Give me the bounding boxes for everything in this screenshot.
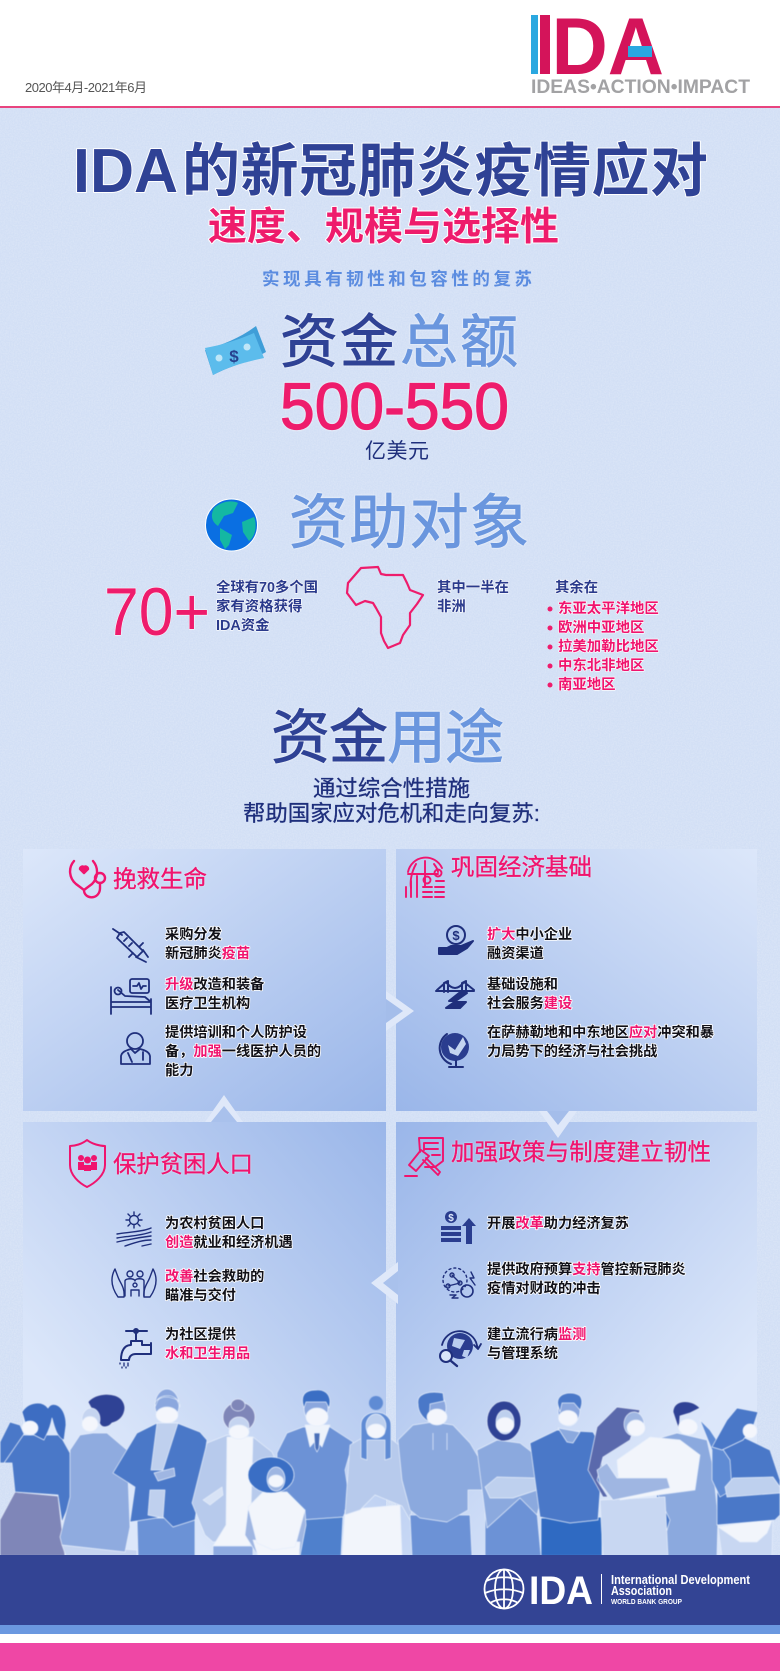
person: curly hair woman: [60, 1394, 137, 1556]
list: other regions: 南亚地区: [558, 676, 616, 693]
person: woman with bun: [342, 1396, 415, 1556]
text: 新冠肺炎疫苗: [165, 945, 250, 962]
list: other regions: 其余在: [555, 578, 598, 596]
text: 提供政府预算支持管控新冠肺炎: [487, 1261, 686, 1278]
text: [487, 926, 572, 962]
arrow: right: [386, 991, 414, 1031]
text: 基础设施和: [487, 976, 558, 993]
logo: IDA International Development Association: WORLD BANK GROUP: [611, 1597, 682, 1606]
text: 扩大中小企业: [487, 926, 572, 943]
text: eligible countries: IDA资金: [216, 616, 270, 634]
text: 升级改造和装备: [165, 976, 264, 993]
text: 为农村贫困人口: [165, 1215, 264, 1232]
text: 社会服务建设: [487, 995, 572, 1012]
text: 提供培训和个人防护设: [165, 1024, 307, 1041]
list: other regions: 欧洲中亚地区: [558, 618, 644, 636]
logo: IDA International Development Association: [484, 1569, 751, 1613]
icon: banknote: [205, 326, 266, 375]
icon: desk globe: [440, 1033, 469, 1067]
icon: bricks with arrow: [441, 1211, 476, 1244]
heading: recipients: 资助对象: [289, 490, 529, 556]
list: other regions: 拉美加勒比地区: [558, 637, 659, 655]
icon: bricks with arrow: $: [448, 1213, 454, 1224]
text: half in Africa: 其中一半在: [437, 578, 509, 596]
subtitle: 速度、规模与选择性: [208, 206, 559, 249]
panel: protect the poor: [23, 1122, 386, 1556]
person: child: [245, 1457, 306, 1556]
text: [487, 1024, 714, 1060]
text: [487, 1261, 686, 1297]
heading: 加强政策与制度建立韧性: [451, 1139, 711, 1165]
icon: shield with people: [70, 1140, 105, 1187]
text: [165, 1215, 293, 1251]
icon: hand with coin: [439, 926, 473, 954]
intro text: [243, 776, 540, 826]
text: 改善社会救助的: [165, 1268, 264, 1285]
person: woman with windswept hair: [700, 1408, 780, 1556]
text: 备，加强一线医护人员的: [165, 1043, 321, 1060]
icon: syringe: [113, 929, 148, 962]
illustration: crowd of people in masks: [0, 1389, 780, 1556]
footer band: [0, 1555, 780, 1671]
icon: epidemic monitoring: [440, 1331, 481, 1366]
icon: globe with coins: [406, 858, 444, 897]
panel: save lives: [23, 849, 386, 1111]
text: 融资渠道: [487, 945, 544, 962]
logo: IDA International Development Association: Association: [611, 1584, 672, 1598]
intro text: 帮助国家应对危机和走向复苏:: [243, 801, 540, 826]
icon: faucet: [120, 1329, 151, 1368]
panel: policy and institutions: [396, 1122, 757, 1556]
arrow: up: [205, 1095, 243, 1122]
logo: IDA Ideas Action Impact: IDEAS•ACTION•IMPACT: [531, 76, 750, 98]
text: [487, 1326, 586, 1362]
icon: hands with family: [112, 1269, 156, 1297]
text: 采购分发: [165, 926, 222, 943]
unit label: 亿美元: [365, 440, 429, 463]
heading: 保护贫困人口: [113, 1151, 253, 1177]
text: half in Africa: [437, 578, 509, 615]
logo: IDA International Development Association: IDA: [529, 1569, 593, 1613]
heading: total funding: 资金总额: [280, 310, 518, 375]
text: 能力: [165, 1062, 193, 1079]
icon: sun over farmland: [117, 1212, 151, 1246]
text: 瞄准与交付: [165, 1287, 236, 1304]
title: 的新冠肺炎疫情应对: [182, 139, 708, 204]
logo: IDA Ideas Action Impact: [530, 2, 750, 98]
text: 力局势下的经济与社会挑战: [487, 1043, 657, 1060]
icon: banknote: $: [229, 347, 239, 366]
list: other regions: 东亚太平洋地区: [558, 599, 659, 617]
heading: 巩固经济基础: [451, 854, 592, 880]
list: other regions: [548, 578, 659, 693]
text: half in Africa: 非洲: [437, 598, 466, 615]
tagline: 实现具有韧性和包容性的复苏: [262, 269, 532, 289]
logo: IDA International Development Association: International Development: [611, 1573, 751, 1587]
heading: use of funds: 资金用途: [271, 705, 504, 771]
text: 与管理系统: [487, 1345, 558, 1362]
date label: 2020年4月-2021年6月: [25, 80, 147, 95]
text: 疫情对财政的冲击: [487, 1280, 601, 1297]
person: man with crossed arms: [113, 1389, 207, 1556]
icon: globe: [206, 499, 258, 551]
icon: hospital bed: [111, 979, 151, 1014]
header band: [0, 0, 780, 107]
text: 医疗卫生机构: [165, 995, 250, 1012]
person: man in blue tee: [530, 1393, 603, 1556]
text: [165, 1024, 321, 1079]
text: 水和卫生用品: [165, 1346, 250, 1362]
text: eligible countries: 家有资格获得: [216, 597, 302, 615]
icon: gavel and document: [405, 1138, 443, 1176]
arrow: down: [539, 1111, 577, 1138]
text: [165, 1268, 264, 1304]
person: man in vest: [277, 1390, 353, 1556]
icon: doctor: [121, 1033, 150, 1064]
text: 建立流行病监测: [487, 1326, 586, 1343]
icon: world bank globe: [484, 1570, 524, 1608]
intro text: 通过综合性措施: [313, 776, 470, 801]
arrow: left: [371, 1262, 398, 1304]
big number 500-550: 500-550: [280, 369, 509, 443]
list: other regions: 中东北非地区: [558, 656, 644, 674]
icon: stethoscope: [70, 861, 105, 897]
person: woman in cardigan: [192, 1399, 280, 1556]
text: [165, 926, 250, 962]
icon: virus and finance: [443, 1268, 475, 1298]
icon: Africa outline: [347, 567, 423, 648]
text: 创造就业和经济机遇: [165, 1234, 293, 1251]
heading: 挽救生命: [113, 866, 207, 892]
text: eligible countries: 全球有70多个国: [216, 578, 318, 596]
title: IDA: [73, 137, 178, 206]
person: woman in white top: [588, 1407, 700, 1556]
text: 开展改革助力经济复苏: [487, 1215, 629, 1232]
text: 在萨赫勒地和中东地区应对冲突和暴: [487, 1024, 714, 1041]
icon: bridge: [436, 981, 474, 1008]
person: man with tie strip: [653, 1402, 718, 1556]
stat: 70+: 70+: [104, 574, 210, 650]
panel: economic foundations: $: [452, 928, 460, 943]
panel: economic foundations: [396, 849, 757, 1111]
person: woman with dark hair: [477, 1401, 545, 1556]
person: man in hoodie: [398, 1392, 490, 1556]
person: ponytail woman: [0, 1403, 73, 1556]
text: [487, 976, 572, 1012]
text: [165, 976, 264, 1012]
text: [165, 1326, 250, 1362]
text: 为社区提供: [165, 1326, 236, 1343]
logo: IDA Ideas Action Impact: IDA: [530, 2, 664, 92]
text: eligible countries: [216, 578, 318, 634]
